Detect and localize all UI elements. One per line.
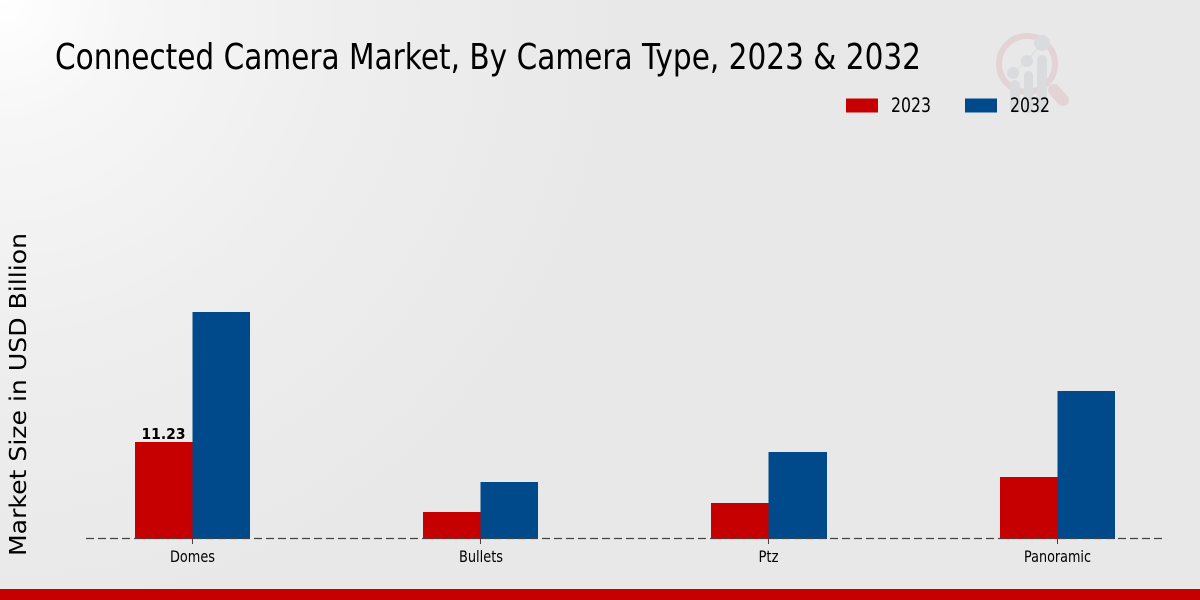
legend item: 2032 <box>965 94 1050 117</box>
title: Connected Camera Market, By Camera Type, 2023 & 2032 <box>55 37 921 78</box>
legend <box>846 94 1050 117</box>
x axis labels: Domes <box>170 547 215 566</box>
x axis labels: Ptz <box>758 547 778 566</box>
icon: watermark logo <box>999 35 1063 113</box>
group: Domes <box>135 312 250 539</box>
group: Bullets <box>423 482 538 539</box>
x axis labels: Bullets <box>459 547 503 566</box>
x axis labels <box>170 547 1091 566</box>
group: Panoramic <box>1000 391 1115 539</box>
y axis label: Market Size in USD Billion <box>4 233 32 556</box>
value label: 11.23 <box>142 425 186 443</box>
legend item: 2032: 2032 <box>1010 94 1050 117</box>
legend item: 2023 <box>846 94 931 117</box>
bar chart <box>86 312 1164 544</box>
x axis labels: Panoramic <box>1024 547 1091 566</box>
footer bar <box>0 589 1200 600</box>
legend item: 2023: 2023 <box>891 94 931 117</box>
group: Ptz <box>711 452 827 539</box>
